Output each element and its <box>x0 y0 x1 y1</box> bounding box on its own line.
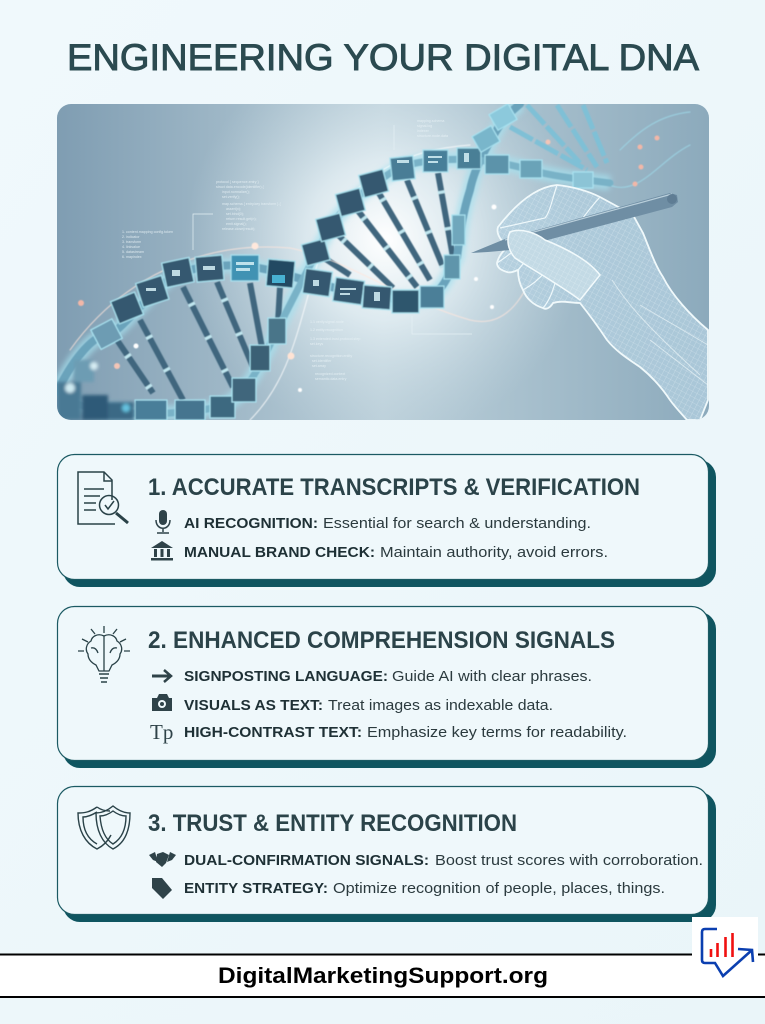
bullet: entity strategy <box>184 880 665 897</box>
icon: tag <box>152 878 172 899</box>
heading 3: 3. TRUST & ENTITY RECOGNITION <box>148 810 517 837</box>
card shadow 2 <box>63 612 716 768</box>
code annotations: set.array <box>312 364 326 368</box>
code annotations: 6. mapindex <box>122 255 142 259</box>
icon: institution <box>151 541 173 560</box>
heading 1: 1. ACCURATE TRANSCRIPTS & VERIFICATION <box>148 474 640 501</box>
code annotations: 3. transform <box>122 240 141 244</box>
panel: accurate transcripts and verification <box>58 454 716 587</box>
DNA data blocks <box>91 104 593 420</box>
code annotations: input.normalize(); <box>222 190 250 194</box>
bullet: dual confirmation: Boost trust scores with corroboration. <box>435 852 703 869</box>
DNA backbone strands <box>57 104 690 420</box>
panel: enhanced comprehension signals <box>58 606 716 768</box>
bullet: AI recognition <box>184 515 591 532</box>
code annotations: set.keys <box>310 342 323 346</box>
finger outlines <box>497 185 600 308</box>
code annotations: protocol { sequence.entry } <box>216 180 260 184</box>
code annotations: 5. datastream <box>122 250 144 254</box>
code annotations: map.schema { entry.key transform } { <box>222 202 281 206</box>
bullet: manual brand check: MANUAL BRAND CHECK: <box>184 545 375 561</box>
code annotations: 2. indicator <box>122 235 140 239</box>
code annotations: signal.log <box>417 124 432 128</box>
bullet: AI recognition: AI RECOGNITION: <box>184 516 318 532</box>
bullet: manual brand check <box>184 544 608 561</box>
icon: arrow <box>152 670 171 682</box>
code annotations: release.close(result); <box>222 227 255 231</box>
card body 3 <box>58 786 708 914</box>
card shadow 1 <box>63 460 716 587</box>
glowing particles <box>78 136 660 392</box>
icon: microphone <box>156 510 170 533</box>
footer text: DigitalMarketingSupport.org <box>218 963 548 988</box>
code annotations: set.bind(0); <box>226 212 244 216</box>
wireframe hand <box>471 180 715 425</box>
code annotations: recognized.context <box>315 372 345 376</box>
bullet: AI recognition: Essential for search & understanding. <box>323 515 591 532</box>
bullet: manual brand check: Maintain authority, avoid errors. <box>380 544 608 561</box>
icon: handshake <box>149 852 176 867</box>
code annotations: mapping.schema <box>417 119 444 123</box>
code annotations: semantic.data.entry <box>315 377 347 381</box>
bullet: visuals as text <box>184 697 553 714</box>
bullet: visuals as text: Treat images as indexable data. <box>328 697 553 714</box>
bullet: signposting <box>184 668 592 685</box>
stylus <box>471 193 678 253</box>
code annotations: set.verify(); <box>222 195 240 199</box>
code annotations: 1. content.mapping config.token <box>122 230 173 234</box>
DNA rungs <box>117 105 607 400</box>
icon: document with magnifier <box>78 472 128 524</box>
logo <box>692 917 758 981</box>
icon: camera <box>152 694 172 711</box>
code annotations: set.identifier <box>312 359 332 363</box>
code annotations: 1.2 entity.recognition <box>310 328 343 332</box>
footer band <box>0 954 765 998</box>
code annotations: 1.3 extended.trust.protocol.step <box>310 337 360 341</box>
bullet: visuals as text: VISUALS AS TEXT: <box>184 698 323 714</box>
bullet: dual confirmation <box>184 852 703 869</box>
bullet: entity strategy: ENTITY STRATEGY: <box>184 881 328 897</box>
title: ENGINEERING YOUR DIGITAL DNA <box>67 37 699 78</box>
code annotations: struct data.encode(identifier) { <box>216 185 265 189</box>
icon: twin shields <box>78 806 130 849</box>
code annotations: emit.signal(); <box>226 222 247 226</box>
code annotations: return result.get(n); <box>226 217 257 221</box>
card body 2 <box>58 606 708 760</box>
code annotations: assert(x); <box>226 207 241 211</box>
icon: typography: Tp <box>150 720 173 744</box>
bullet: high contrast <box>184 724 627 741</box>
bullet: entity strategy: Optimize recognition of people, places, things. <box>333 880 665 897</box>
DNA glow <box>57 104 610 414</box>
icon: brain light bulb <box>78 626 130 682</box>
code annotations: structure.recognition.entity <box>310 354 352 358</box>
heading 2: 2. ENHANCED COMPREHENSION SIGNALS <box>148 627 615 654</box>
panel: trust and entity recognition <box>58 786 716 922</box>
bullet: signposting: Guide AI with clear phrases. <box>392 668 592 685</box>
card shadow 3 <box>63 792 716 922</box>
bullet: dual confirmation: DUAL-CONFIRMATION SIGNALS: <box>184 853 429 869</box>
code annotations: 1.1 verify.signal.node <box>310 320 344 324</box>
thumb over stylus <box>508 230 600 300</box>
bullet: signposting: SIGNPOSTING LANGUAGE: <box>184 669 388 685</box>
code annotations: indexer <box>417 129 430 133</box>
card body 1 <box>58 454 708 580</box>
bullet: high contrast: HIGH-CONTRAST TEXT: <box>184 725 362 741</box>
block highlights <box>146 153 469 301</box>
bullet: high contrast: Emphasize key terms for readability. <box>367 724 627 741</box>
code annotations: 4. linkvalue <box>122 245 140 249</box>
hero illustration: DNA helix and wireframe hand <box>57 104 715 425</box>
code annotations <box>122 119 448 381</box>
lower left blurred helix <box>57 360 134 420</box>
code annotations: structure.node.data <box>417 134 448 138</box>
